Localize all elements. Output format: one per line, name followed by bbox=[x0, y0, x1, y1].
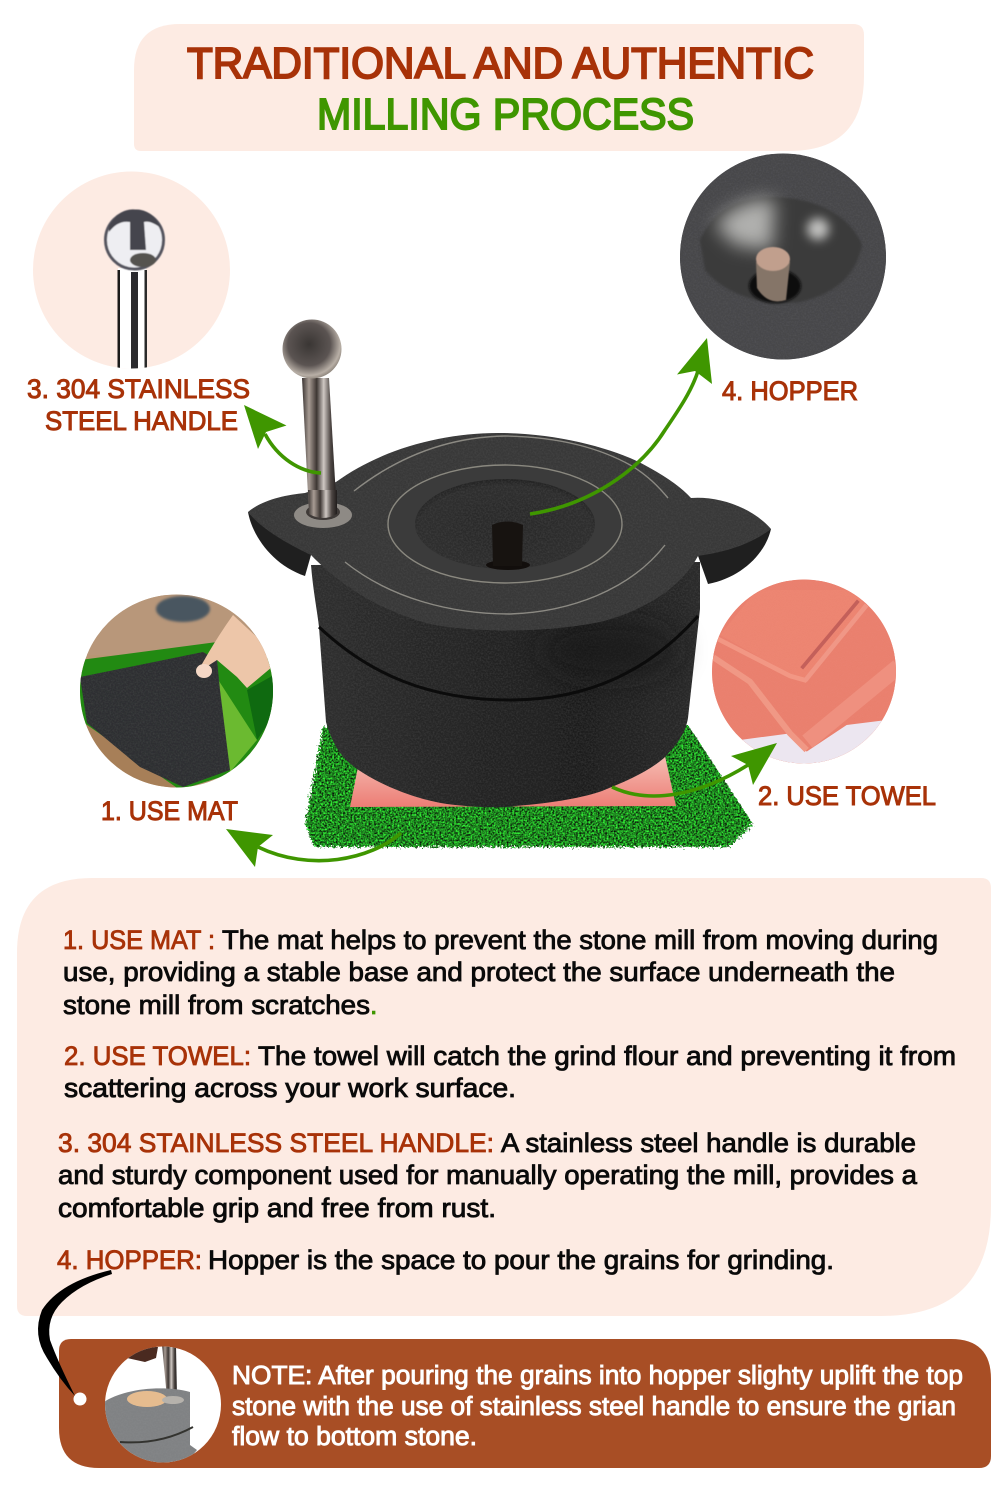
item 3: stainless steel handle: A stainless steel handle is durable bbox=[501, 1128, 916, 1158]
item 3: stainless steel handle: comfortable grip and free from rust. bbox=[58, 1193, 496, 1223]
item 4: hopper: 4. HOPPER: bbox=[57, 1245, 202, 1275]
product: stone mill on mat and towel bbox=[248, 320, 771, 847]
item 4: hopper: Hopper is the space to pour the grains for grinding. bbox=[208, 1245, 834, 1275]
item 1: use mat: The mat helps to prevent the stone mill from moving during bbox=[222, 925, 938, 955]
outer engraved ring bbox=[345, 436, 668, 614]
arrow: to towel photo bbox=[612, 743, 777, 796]
item 2: use towel: 2. USE TOWEL: bbox=[64, 1041, 251, 1071]
item 2: use towel bbox=[64, 1041, 956, 1103]
left ear underside bbox=[248, 512, 313, 576]
inner engraved ring bbox=[388, 465, 622, 583]
item 3: stainless steel handle: 3. 304 STAINLESS STEEL HANDLE: bbox=[58, 1128, 494, 1158]
label: 1. use mat: 1. USE MAT bbox=[101, 796, 238, 826]
item 1: use mat: 1. USE MAT : bbox=[63, 925, 215, 955]
hopper bowl bbox=[415, 479, 595, 569]
item 1: use mat bbox=[63, 925, 938, 1020]
item 1: use mat: stone mill from scratches bbox=[63, 990, 370, 1020]
label: 3. 304 stainless steel handle: STEEL HANDLE bbox=[45, 406, 238, 436]
groove between stones bbox=[319, 616, 698, 700]
curved brush connector bbox=[38, 1270, 112, 1396]
title line 2: MILLING PROCESS bbox=[317, 90, 694, 139]
handle stem bbox=[302, 378, 337, 514]
photo circle: use towel bbox=[712, 580, 896, 764]
note text: flow to bottom stone. bbox=[232, 1423, 477, 1451]
photo circle: stainless steel handle bbox=[33, 172, 230, 370]
note text: stone with the use of stainless steel handle to ensure the grian bbox=[232, 1393, 956, 1421]
item 1: use mat: use, providing a stable base and protect the surface underneath the bbox=[63, 957, 895, 987]
panel: descriptions bbox=[17, 878, 991, 1316]
note text bbox=[232, 1362, 963, 1451]
panel: note bbox=[59, 1339, 991, 1470]
right ear underside bbox=[697, 529, 771, 584]
handle ball bbox=[282, 320, 342, 378]
label: 3. 304 stainless steel handle bbox=[27, 374, 250, 436]
grass mat bbox=[305, 725, 753, 847]
arrow: to mat photo bbox=[226, 829, 401, 867]
dark shading on upper stone bbox=[540, 620, 680, 680]
note photo bbox=[104, 1345, 221, 1470]
title banner bbox=[134, 24, 864, 151]
handle collar bbox=[294, 502, 352, 528]
central shaft bbox=[486, 522, 530, 570]
label: 2. use towel: 2. USE TOWEL bbox=[758, 781, 936, 811]
note text: NOTE: After pouring the grains into hopper slighty uplift the top bbox=[232, 1362, 963, 1390]
item 3: stainless steel handle: and sturdy component used for manually operating the mill, provides a bbox=[58, 1160, 917, 1190]
arrow: to hopper photo bbox=[530, 338, 712, 514]
photo circle: use mat bbox=[80, 594, 274, 790]
label: 4. hopper: 4. HOPPER bbox=[722, 376, 858, 406]
label: 3. 304 stainless steel handle: 3. 304 STAINLESS bbox=[27, 374, 250, 404]
arrow: to handle photo bbox=[244, 405, 321, 473]
item 3: stainless steel handle bbox=[58, 1128, 917, 1223]
item 2: use towel: scattering across your work surface. bbox=[64, 1073, 516, 1103]
title line 1: TRADITIONAL AND AUTHENTIC bbox=[187, 39, 814, 88]
item 2: use towel: The towel will catch the grind flour and preventing it from bbox=[258, 1041, 956, 1071]
photo circle: hopper bbox=[680, 154, 886, 360]
top face bbox=[248, 433, 771, 630]
stone body bbox=[311, 562, 700, 807]
towel layer bbox=[350, 756, 676, 807]
item 1: use mat: . bbox=[370, 990, 377, 1020]
note dot bbox=[74, 1392, 86, 1406]
